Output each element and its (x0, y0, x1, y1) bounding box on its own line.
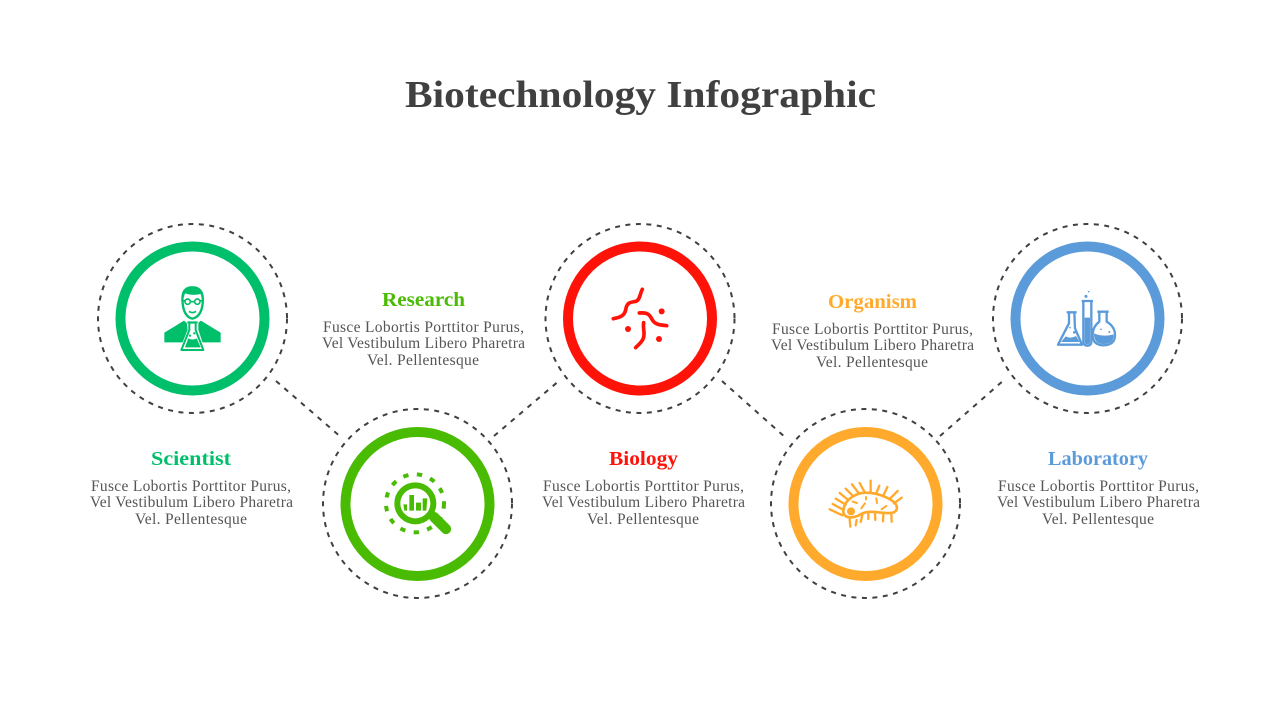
icon: microbes (613, 289, 667, 348)
icon: scientist with flask (164, 286, 221, 350)
icon: magnifier with bar chart (386, 474, 446, 532)
text block: organism: Organism (828, 291, 917, 313)
text block: laboratory (997, 448, 1200, 528)
text block: research (322, 289, 525, 369)
text block: laboratory: Fusce Lobortis Porttitor Purus, (998, 478, 1199, 495)
text block: biology: Vel. Pellentesque (587, 511, 699, 528)
text block: research: Research (382, 289, 465, 311)
text block: laboratory: Vel. Pellentesque (1042, 511, 1154, 528)
text block: scientist: Fusce Lobortis Porttitor Purus, (91, 478, 291, 495)
text block: biology: Biology (609, 448, 678, 470)
text block: organism: Fusce Lobortis Porttitor Purus, (772, 321, 973, 338)
text block: research: Fusce Lobortis Porttitor Purus, (323, 319, 524, 336)
text block: organism: Vel. Pellentesque (816, 354, 928, 371)
text block: scientist: Vel. Pellentesque (135, 511, 247, 528)
text block: organism (771, 291, 974, 371)
text block: research: Vel. Pellentesque (367, 352, 479, 369)
icon: flasks and test tube (1058, 291, 1115, 346)
step 1: scientist circle (98, 224, 287, 413)
text block: biology: Vel Vestibulum Libero Pharetra (542, 494, 745, 511)
text block: biology: Fusce Lobortis Porttitor Purus, (543, 478, 744, 495)
text block: scientist (90, 448, 293, 528)
dashed connectors (276, 380, 1004, 438)
step 3: biology circle (546, 224, 734, 413)
text block: laboratory: Vel Vestibulum Libero Pharetra (997, 494, 1200, 511)
step 4: organism circle (771, 409, 960, 598)
text block: organism: Vel Vestibulum Libero Pharetra (771, 337, 974, 354)
text block: scientist: Vel Vestibulum Libero Pharetra (90, 494, 293, 511)
step 5: laboratory circle (993, 224, 1182, 413)
text block: laboratory: Laboratory (1048, 448, 1148, 470)
icon: bacterium (830, 481, 902, 527)
text block: research: Vel Vestibulum Libero Pharetra (322, 335, 525, 352)
step 2: research circle (323, 409, 512, 598)
title: Biotechnology Infographic (405, 74, 876, 116)
text block: scientist: Scientist (151, 448, 231, 470)
text block: biology (542, 448, 745, 528)
